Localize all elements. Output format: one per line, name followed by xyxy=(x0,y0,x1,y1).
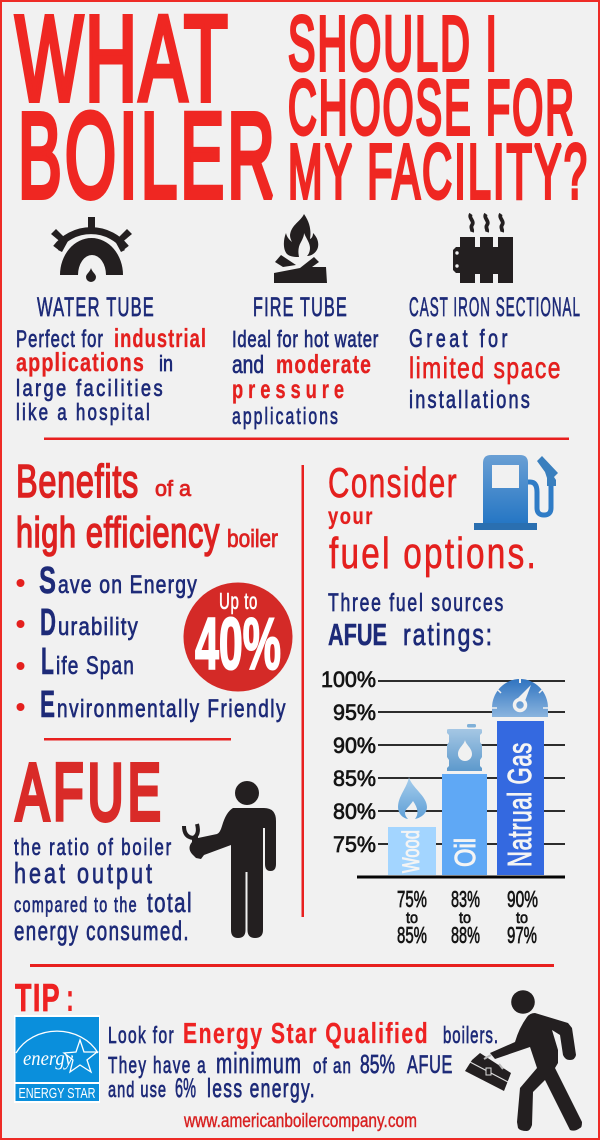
list: benefits: D xyxy=(40,602,56,644)
icon: fire tube flame xyxy=(274,214,327,283)
labels: AFUE ranges xyxy=(397,886,538,948)
text: three fuel sources xyxy=(328,589,505,652)
panel: boiler types xyxy=(16,292,581,429)
text: three fuel sources: ratings: xyxy=(403,617,494,652)
icon: walking man with toolbox xyxy=(465,990,582,1131)
icon: oil barrel xyxy=(447,724,482,771)
text: tip body: Energy Star Qualified xyxy=(183,1018,429,1050)
bar: wood xyxy=(388,827,436,875)
list: benefits: E xyxy=(40,684,55,726)
text: AFUE definition: total xyxy=(147,887,193,918)
callout: up to 40%: 40% xyxy=(195,604,281,685)
labels: AFUE ranges: 75% xyxy=(397,886,427,912)
text: water tube description: applications xyxy=(16,347,145,377)
callout: up to 40%: Up to xyxy=(219,588,258,614)
text: fire tube description: applications xyxy=(232,403,340,429)
title: BOILER xyxy=(18,87,278,223)
bar: oil: Oil xyxy=(450,838,482,867)
text: tip body: and use xyxy=(108,1077,167,1102)
list: benefits: S xyxy=(39,560,56,602)
heading: AFUE: AFUE xyxy=(16,748,165,836)
heading: consider your fuel options: your xyxy=(328,503,374,529)
icon: wood flame xyxy=(398,777,427,819)
heading: consider your fuel options: fuel options. xyxy=(329,529,538,578)
text: cast iron description: Great for xyxy=(409,325,511,353)
text: AFUE definition: heat output xyxy=(14,858,155,890)
text: tip body xyxy=(108,1018,499,1103)
text: fire tube description: pressure xyxy=(232,374,349,404)
heading: water tube: WATER TUBE xyxy=(37,292,155,322)
labels: AFUE ranges: to xyxy=(459,910,471,927)
icon: fuel pump xyxy=(474,455,558,530)
labels: AFUE ranges: 88% xyxy=(451,922,480,948)
labels: AFUE ranges: 97% xyxy=(507,922,537,948)
icon: technician with wrench xyxy=(184,781,276,938)
icon: energy star logo: energy xyxy=(23,1048,73,1070)
text: cast iron description: installations xyxy=(409,386,532,414)
text: water tube description xyxy=(16,323,207,425)
text: three fuel sources: AFUE xyxy=(328,617,387,652)
bar: oil xyxy=(442,774,487,875)
text: three fuel sources: Three fuel sources xyxy=(328,589,505,617)
text: fire tube description xyxy=(232,326,379,429)
heading: benefits: high efficiency xyxy=(16,509,220,557)
text: tip body: 6% xyxy=(175,1073,196,1103)
icon: energy star logo xyxy=(14,1015,100,1103)
text: water tube description: in xyxy=(159,351,173,376)
text: fire tube description: moderate xyxy=(276,349,372,379)
axis labels: 100% xyxy=(321,667,376,692)
text: tip body: boilers. xyxy=(443,1022,499,1048)
heading: fire tube: FIRE TUBE xyxy=(253,292,348,322)
icon: water tube gauge xyxy=(51,217,132,282)
labels: AFUE ranges: 90% xyxy=(507,886,538,912)
list: benefits: L xyxy=(41,641,54,683)
axis labels: 95% xyxy=(333,700,376,725)
text: tip body: Look for xyxy=(108,1022,175,1048)
text: tip body: AFUE xyxy=(407,1051,453,1079)
axis labels: 85% xyxy=(333,766,376,791)
text: AFUE definition: the ratio of boiler xyxy=(14,834,173,860)
axis labels: 75% xyxy=(333,832,376,857)
text: tip body: They have a xyxy=(108,1052,207,1078)
axis labels xyxy=(321,667,376,857)
labels: AFUE ranges: to xyxy=(516,910,528,927)
heading: tip: TIP xyxy=(15,977,61,1020)
icon: gas gauge xyxy=(492,679,548,717)
heading: benefits: Benefits xyxy=(16,455,139,507)
bar chart: AFUE ratings xyxy=(321,667,565,948)
labels: AFUE ranges: 85% xyxy=(397,922,427,948)
text: website: www.americanboilercompany.com xyxy=(183,1111,417,1132)
text: tip body: less energy. xyxy=(207,1073,316,1103)
text: water tube description: like a hospital xyxy=(16,399,152,425)
heading: consider your fuel options xyxy=(328,459,538,578)
text: fire tube description: Ideal for hot water xyxy=(232,326,379,352)
text: cast iron description xyxy=(409,325,562,414)
list: benefits: ave on Energy xyxy=(58,571,198,599)
heading: tip: : xyxy=(66,977,74,1020)
text: tip body: 85% xyxy=(360,1049,395,1079)
text: AFUE definition: energy consumed. xyxy=(14,916,190,946)
icon: cast iron radiator xyxy=(453,214,513,283)
heading: consider your fuel options: Consider xyxy=(328,459,458,506)
labels: AFUE ranges: to xyxy=(406,910,418,927)
list: benefits: urability xyxy=(58,613,139,641)
text: tip body: minimum xyxy=(216,1048,302,1080)
text: water tube description: Perfect for xyxy=(16,326,104,353)
heading: benefits: of a xyxy=(155,476,192,501)
text: water tube description: large facilities xyxy=(16,375,165,401)
callout: up to 40% xyxy=(184,582,292,692)
labels: AFUE ranges: 83% xyxy=(451,886,480,912)
bar: wood: Wood xyxy=(398,830,425,873)
text: water tube description: industrial xyxy=(114,323,207,353)
list: benefits xyxy=(16,560,287,726)
heading: benefits xyxy=(16,455,278,557)
heading: benefits: boiler xyxy=(227,525,278,553)
title xyxy=(16,0,589,223)
axis labels: 80% xyxy=(333,799,376,824)
text: fire tube description: and xyxy=(232,351,264,379)
bar: natural gas xyxy=(497,721,544,875)
bar: natural gas: Natrual Gas xyxy=(501,742,538,867)
text: AFUE definition xyxy=(14,834,193,946)
list: benefits: nvironmentally Friendly xyxy=(57,695,287,723)
text: AFUE definition: compared to the xyxy=(14,894,138,917)
icon: energy star logo: ENERGY STAR xyxy=(18,1085,96,1102)
axis labels: 90% xyxy=(333,733,376,758)
list: benefits: ife Span xyxy=(56,652,135,680)
text: tip body: of an xyxy=(313,1055,352,1078)
